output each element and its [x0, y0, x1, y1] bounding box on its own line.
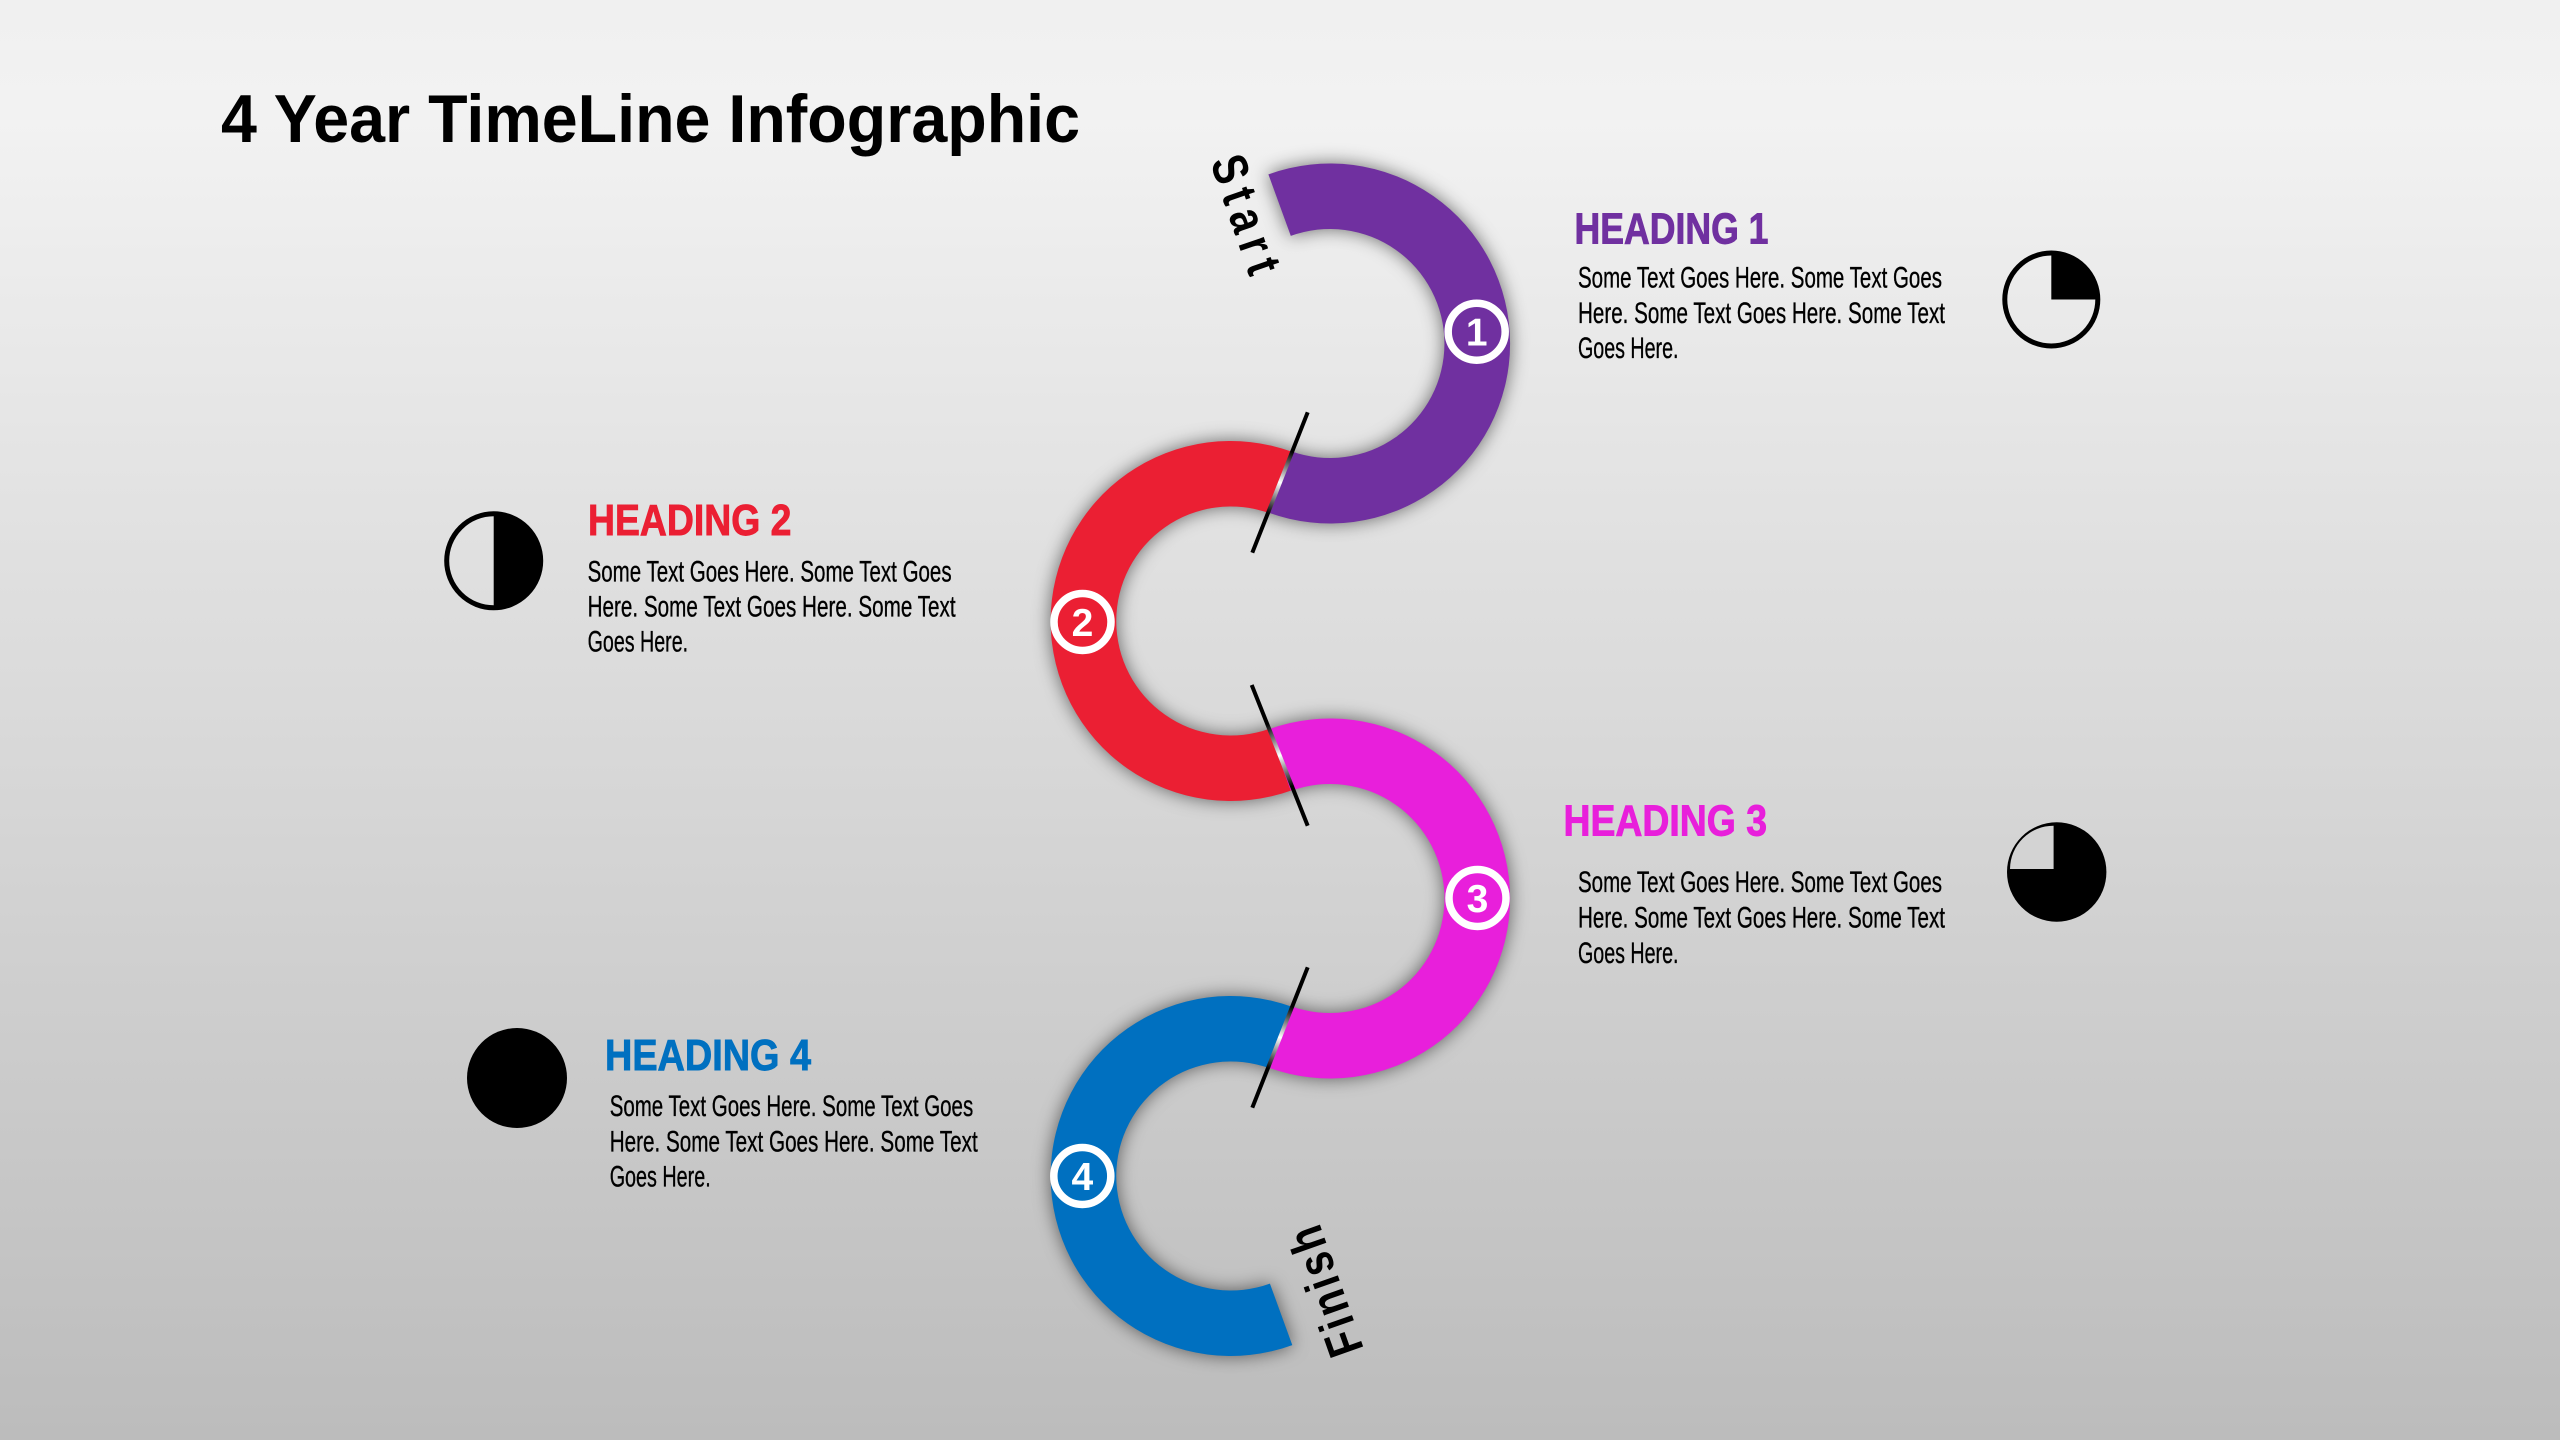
badge 2 — [1054, 594, 1111, 650]
badge 3: 3 — [1467, 878, 1488, 921]
finish label: Finish — [1276, 1219, 1374, 1364]
block 4 — [605, 1031, 978, 1194]
ring shadows — [1051, 163, 1510, 1356]
text 4: Goes Here. — [610, 1161, 711, 1194]
block 1 — [1574, 205, 1945, 365]
icon: quarter pie — [2005, 253, 2098, 346]
block 2 — [588, 496, 956, 659]
arc 3: magenta — [1268, 719, 1510, 1078]
heading 4: HEADING 4 — [605, 1031, 811, 1080]
heading 1: HEADING 1 — [1574, 205, 1768, 254]
text 1: Goes Here. — [1578, 332, 1678, 365]
text 4: Here. Some Text Goes Here. Some Text — [610, 1126, 978, 1159]
badge 3 — [1449, 870, 1506, 926]
text 1: Here. Some Text Goes Here. Some Text — [1578, 297, 1945, 330]
text 3: Goes Here. — [1578, 937, 1678, 970]
divider line 2 — [1252, 685, 1308, 826]
icon: three-quarter pie — [2007, 822, 2106, 922]
heading 2: HEADING 2 — [588, 496, 791, 545]
arc 1: purple — [1268, 163, 1510, 523]
badge 1: 1 — [1466, 312, 1488, 354]
block 3 — [1564, 796, 1945, 970]
text 4: Some Text Goes Here. Some Text Goes — [610, 1090, 973, 1123]
text 3: Some Text Goes Here. Some Text Goes — [1578, 866, 1942, 899]
start label: Start — [1200, 147, 1293, 281]
text 2: Goes Here. — [588, 626, 688, 659]
text 4 — [610, 1090, 978, 1194]
divider line 3 — [1252, 967, 1308, 1108]
arc 2: red — [1051, 441, 1292, 801]
icon: full circle — [467, 1028, 567, 1128]
text 2: Here. Some Text Goes Here. Some Text — [588, 591, 956, 624]
heading 3: HEADING 3 — [1564, 796, 1767, 845]
icon: half pie — [447, 514, 541, 608]
badge 1 — [1448, 303, 1505, 360]
badge 4 — [1054, 1148, 1111, 1204]
text 1: Some Text Goes Here. Some Text Goes — [1578, 262, 1942, 295]
text 3: Here. Some Text Goes Here. Some Text — [1578, 902, 1945, 935]
badge 2: 2 — [1072, 602, 1093, 645]
arc 4: blue — [1051, 996, 1292, 1356]
text 2 — [588, 555, 956, 659]
text 2: Some Text Goes Here. Some Text Goes — [588, 555, 952, 588]
text 1 — [1578, 262, 1945, 365]
divider line 1 — [1252, 412, 1308, 553]
text 3 — [1578, 866, 1945, 970]
badge 4: 4 — [1071, 1156, 1093, 1199]
serpentine timeline — [1051, 163, 1510, 1356]
title: 4 Year TimeLine Infographic — [221, 81, 1080, 157]
